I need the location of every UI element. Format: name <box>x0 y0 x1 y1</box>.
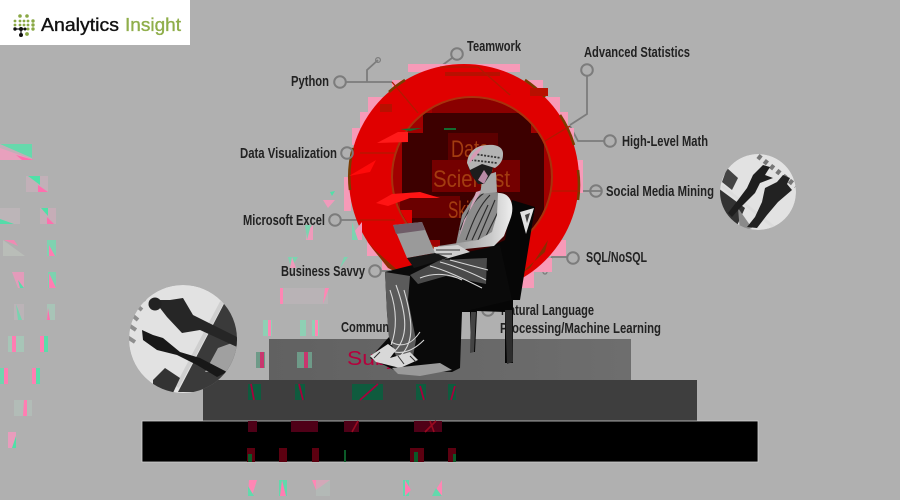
logo text: Analytics <box>41 15 119 35</box>
row 416 <box>248 421 442 432</box>
inner circle ring <box>392 97 552 257</box>
labels: Microsoft Excel <box>243 212 325 229</box>
upper rows <box>306 200 362 240</box>
glitch marks: left edge <box>0 144 56 448</box>
windows <box>722 168 738 190</box>
labels <box>240 38 714 337</box>
brown edge pixels <box>349 80 579 200</box>
labels: Communication <box>341 319 425 336</box>
glitch streaks on circle <box>377 132 408 143</box>
labels: Processing/Machine Learning <box>500 320 661 337</box>
labels: Teamwork <box>467 38 521 55</box>
photo: left circle <box>124 285 240 395</box>
ghost heading fragment: Subject <box>347 348 423 370</box>
labels: High-Level Math <box>622 133 708 150</box>
glitch marks: centre column <box>247 200 456 496</box>
people <box>152 298 237 347</box>
circle text <box>433 136 510 224</box>
laptop <box>393 222 448 268</box>
labels: Data Visualization <box>240 145 337 162</box>
circle text: Scientist <box>433 166 510 193</box>
feet and plinth <box>370 344 418 368</box>
row 320 <box>263 320 319 336</box>
red circle <box>330 64 583 294</box>
step: bottom <box>142 421 758 462</box>
people <box>728 165 773 217</box>
labels: Advanced Statistics <box>584 44 690 61</box>
labels: Social Media Mining <box>606 183 714 200</box>
lap and legs <box>370 245 512 372</box>
logo mark <box>13 14 35 37</box>
step: middle <box>203 380 697 421</box>
label node circles <box>329 48 616 316</box>
row 448 <box>247 448 456 462</box>
row 480 <box>248 480 442 496</box>
labels: SQL/NoSQL <box>586 249 647 266</box>
labels: Business Savvy <box>281 263 365 280</box>
labels: Natural Language <box>501 302 594 319</box>
connector lines <box>341 58 604 274</box>
row 384 <box>248 384 456 400</box>
chair <box>456 200 535 364</box>
logo: Insight <box>125 15 181 35</box>
seated figure <box>370 145 512 376</box>
faint circuit lines on the circle <box>360 67 580 220</box>
circle text: Skills <box>448 197 484 224</box>
neck and face <box>480 172 497 194</box>
pink glitch halo <box>344 64 583 288</box>
statue with laptop and chair <box>370 145 535 376</box>
labels: Python <box>291 73 329 90</box>
robe folds <box>389 260 488 358</box>
arm <box>438 193 512 256</box>
step: top <box>269 339 631 380</box>
logo <box>0 0 190 45</box>
photo: right circle <box>718 154 796 232</box>
windows <box>178 300 240 392</box>
inner dark blocks <box>392 97 544 258</box>
circle text: Data <box>451 136 489 163</box>
row 352 over top step <box>256 352 312 368</box>
torso <box>456 190 507 246</box>
row 288 <box>281 288 328 304</box>
hair <box>467 145 503 170</box>
